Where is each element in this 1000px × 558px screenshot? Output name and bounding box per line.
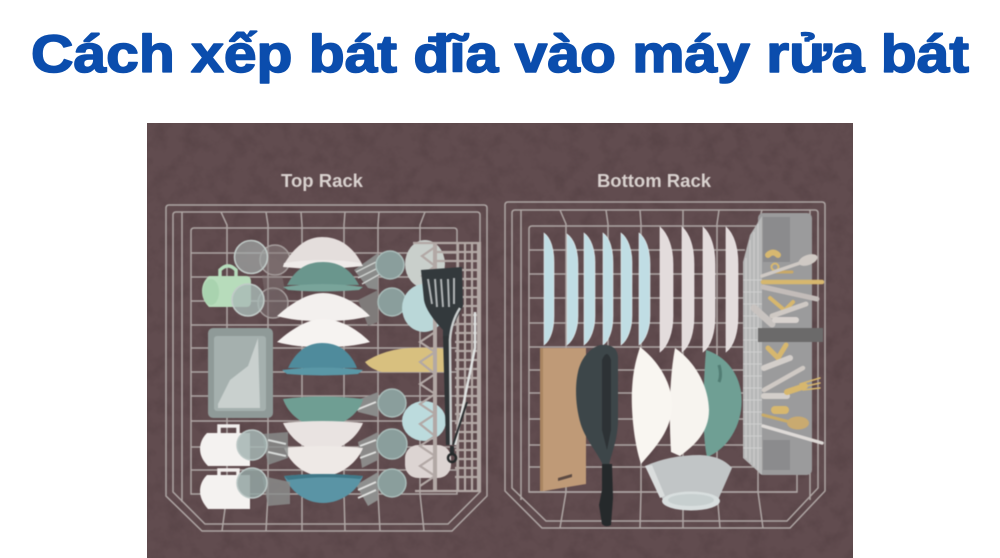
icon: black spatula bbox=[421, 267, 463, 445]
icon: glass baking tray bbox=[208, 328, 273, 418]
icon: cutting board bbox=[540, 348, 586, 491]
icon: mint mug bbox=[202, 266, 251, 307]
top rack: front left glasses bbox=[232, 240, 268, 316]
panel: top rack wire frame bbox=[166, 205, 487, 531]
top rack: lower left glasses bbox=[237, 430, 290, 506]
bottom rack: white plates bbox=[660, 227, 738, 352]
icon: white mugs bbox=[200, 426, 250, 509]
top rack: right glasses bbox=[354, 251, 407, 506]
icon: white bowls upright bbox=[632, 347, 709, 464]
top rack: back left glasses bbox=[258, 245, 290, 318]
panel: bottom rack wire frame bbox=[505, 202, 825, 528]
top rack: bowl stack lower bbox=[283, 396, 363, 503]
icon: clear glass bowl bbox=[645, 455, 732, 510]
heading: top rack: Top Rack bbox=[281, 170, 364, 191]
panel: top rack utensil basket bbox=[413, 243, 480, 491]
heading: bottom rack: Bottom Rack bbox=[597, 170, 712, 191]
panel: illustration background bbox=[147, 123, 853, 558]
icon: metal tongs bbox=[448, 308, 475, 462]
panel: dishwasher racks illustration bbox=[166, 170, 825, 531]
icon: cutlery in basket bbox=[754, 252, 822, 443]
top rack: bowl stack upper bbox=[277, 237, 370, 376]
panel: cutlery basket bbox=[743, 213, 823, 475]
icon: black frying pan bbox=[576, 345, 618, 526]
title: Cách xếp bát đĩa vào máy rửa bát bbox=[31, 25, 969, 84]
icon: green bowl upright bbox=[703, 350, 742, 457]
bottom rack: blue plates bbox=[544, 233, 650, 345]
icon: right side mugs bbox=[402, 240, 451, 478]
icon: yellow plate bbox=[365, 348, 446, 372]
